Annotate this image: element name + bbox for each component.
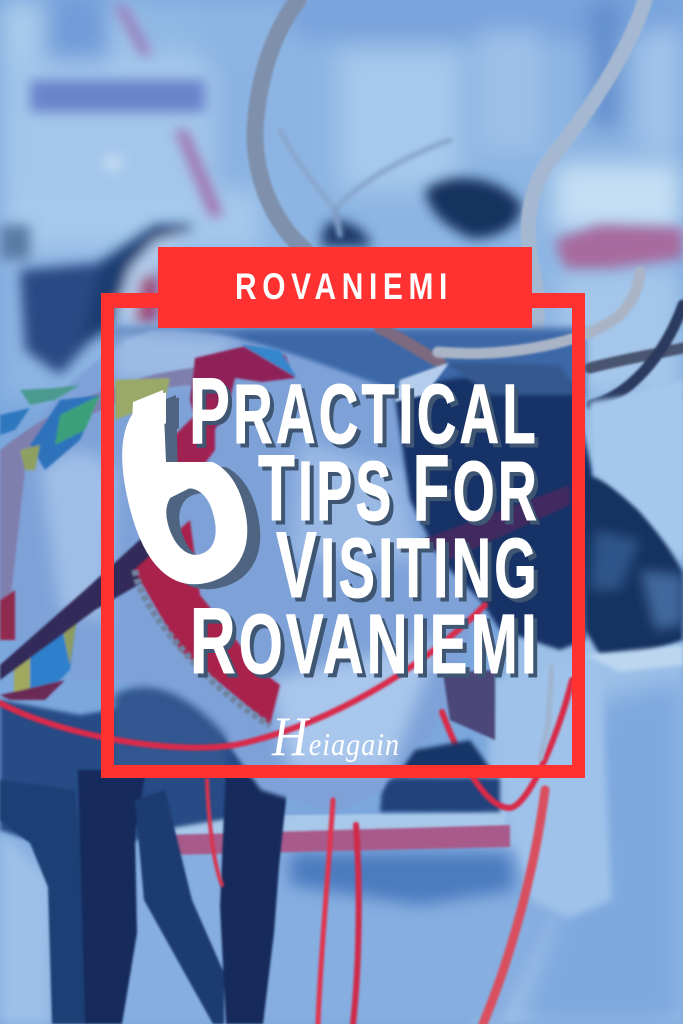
reindeer rear dark mass — [0, 690, 290, 860]
small branch antlers — [280, 130, 450, 235]
dark bridle strap — [0, 535, 155, 680]
red collar — [134, 520, 280, 725]
headline shadow — [193, 362, 544, 697]
red frame — [101, 293, 585, 778]
light sled box right — [492, 660, 612, 918]
antler branches — [380, 272, 683, 405]
colourful harness — [0, 344, 297, 700]
big numeral six: 6 — [83, 324, 281, 653]
right antler — [528, 0, 645, 345]
dark lower fur — [114, 687, 228, 770]
reindeer body white fur — [0, 330, 480, 813]
red reins — [0, 605, 572, 1024]
chin shadow and ruff — [443, 670, 495, 740]
left antler — [255, 0, 305, 250]
neck area behind antlers — [114, 328, 585, 410]
signature: Heiagain: Heiagain — [271, 706, 400, 768]
headline: 6 Practical Tips For Visiting Rovaniemi — [189, 358, 540, 693]
blurred background: tent, sled and distant reindeer — [0, 0, 683, 400]
headline shadow: TIPS FOR — [262, 439, 544, 544]
bridle on head — [420, 485, 570, 560]
leash clip — [540, 665, 552, 760]
snow ground right side — [470, 400, 683, 1024]
sled — [165, 812, 510, 855]
title banner — [158, 247, 532, 328]
headline shadow: VISITING — [280, 516, 544, 621]
banner label: ROVANIEMI — [235, 266, 453, 307]
big numeral six: 6 — [96, 329, 294, 658]
reindeer legs — [0, 770, 287, 1024]
headline: 6 Practical Tips For Visiting Rovaniemi: TIPS FOR — [258, 435, 540, 540]
snow ground bottom — [0, 830, 560, 1024]
dark gap under neck — [380, 778, 500, 812]
big numeral six — [122, 390, 260, 590]
headline shadow: ROVANIEMI — [194, 592, 544, 697]
reindeer head dark — [395, 376, 592, 650]
headline: 6 Practical Tips For Visiting Rovaniemi: ROVANIEMI — [190, 588, 540, 693]
headline: 6 Practical Tips For Visiting Rovaniemi: VISITING — [276, 512, 540, 617]
